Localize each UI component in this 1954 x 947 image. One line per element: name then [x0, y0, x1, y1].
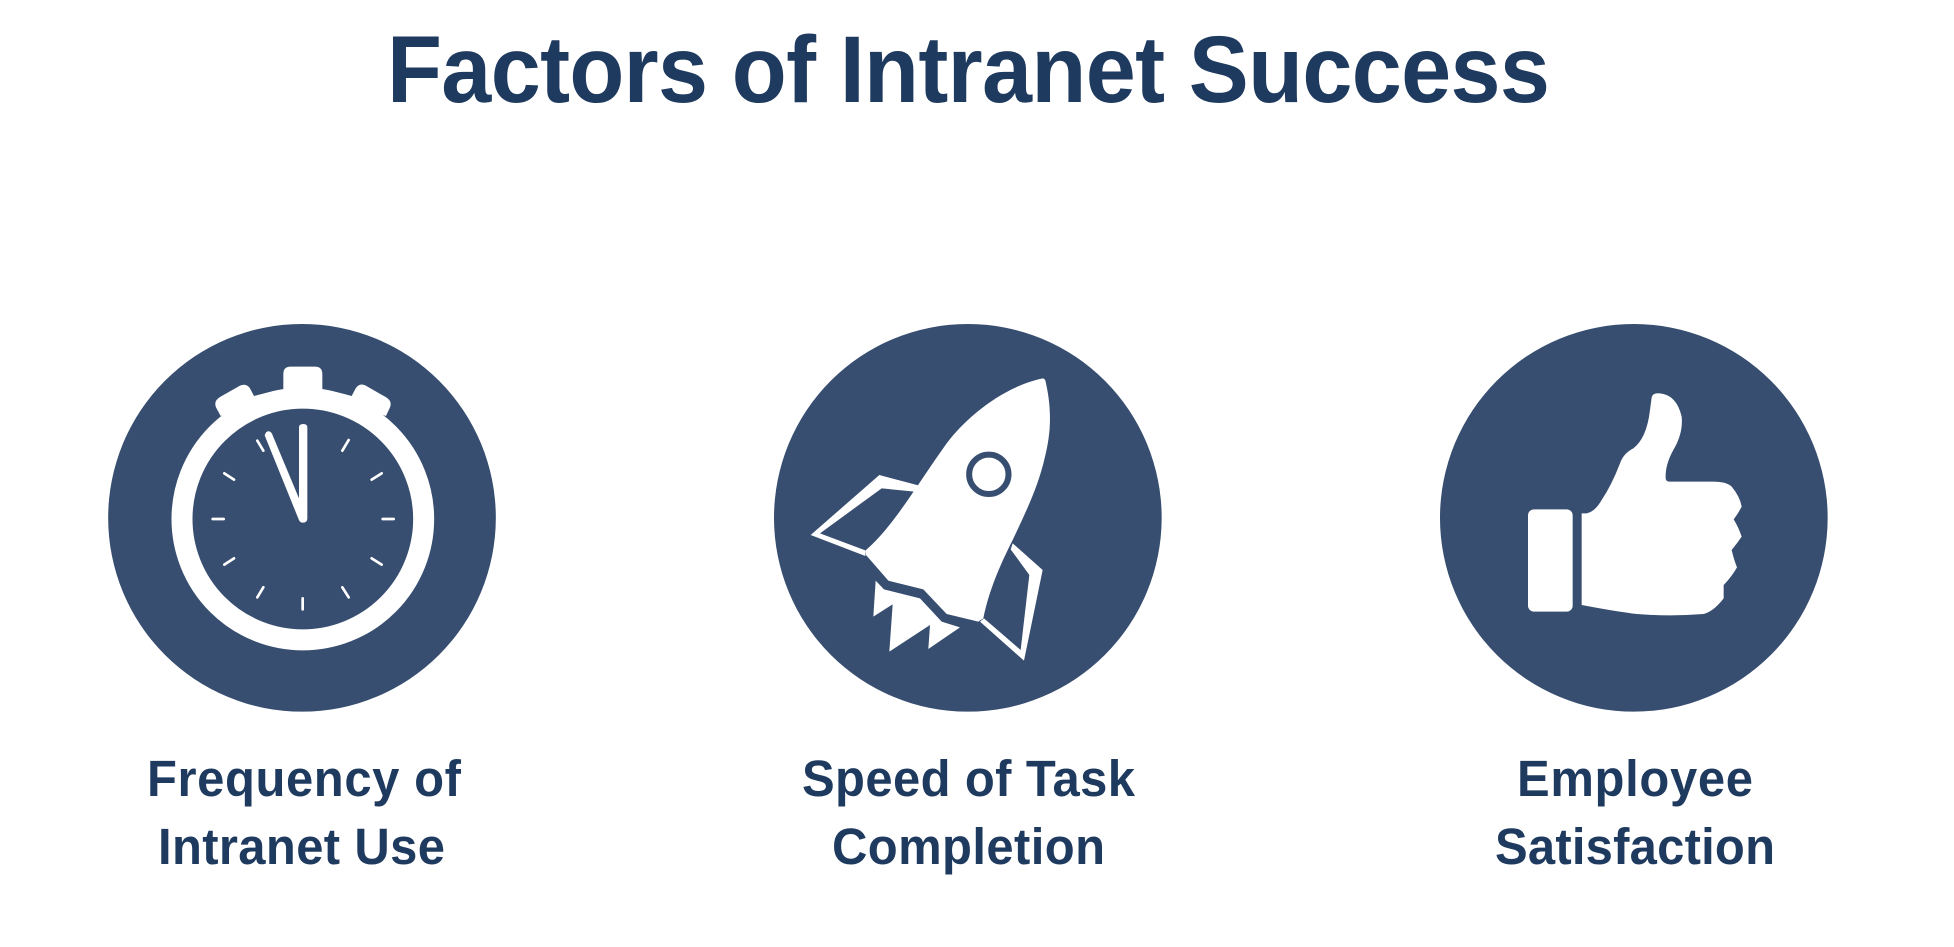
- label: employee satisfaction: Satisfaction: [1495, 818, 1775, 875]
- icon: rocket: [774, 324, 1162, 712]
- panel: frequency of intranet use: [108, 324, 496, 875]
- panel: speed of task completion: [774, 324, 1162, 875]
- label: frequency of intranet use: Frequency of: [147, 750, 461, 807]
- label: speed of task completion: Completion: [832, 818, 1105, 875]
- label: frequency of intranet use: Intranet Use: [158, 818, 445, 875]
- label: frequency of intranet use: [147, 750, 461, 875]
- label: employee satisfaction: [1495, 750, 1775, 875]
- label: speed of task completion: [802, 750, 1135, 875]
- icon: thumbs up: [1440, 324, 1828, 712]
- panel: employee satisfaction: [1440, 324, 1828, 875]
- label: employee satisfaction: Employee: [1517, 750, 1753, 807]
- title: Factors of Intranet Success: [387, 16, 1550, 122]
- icon: stopwatch: [108, 324, 496, 712]
- label: speed of task completion: Speed of Task: [802, 750, 1135, 807]
